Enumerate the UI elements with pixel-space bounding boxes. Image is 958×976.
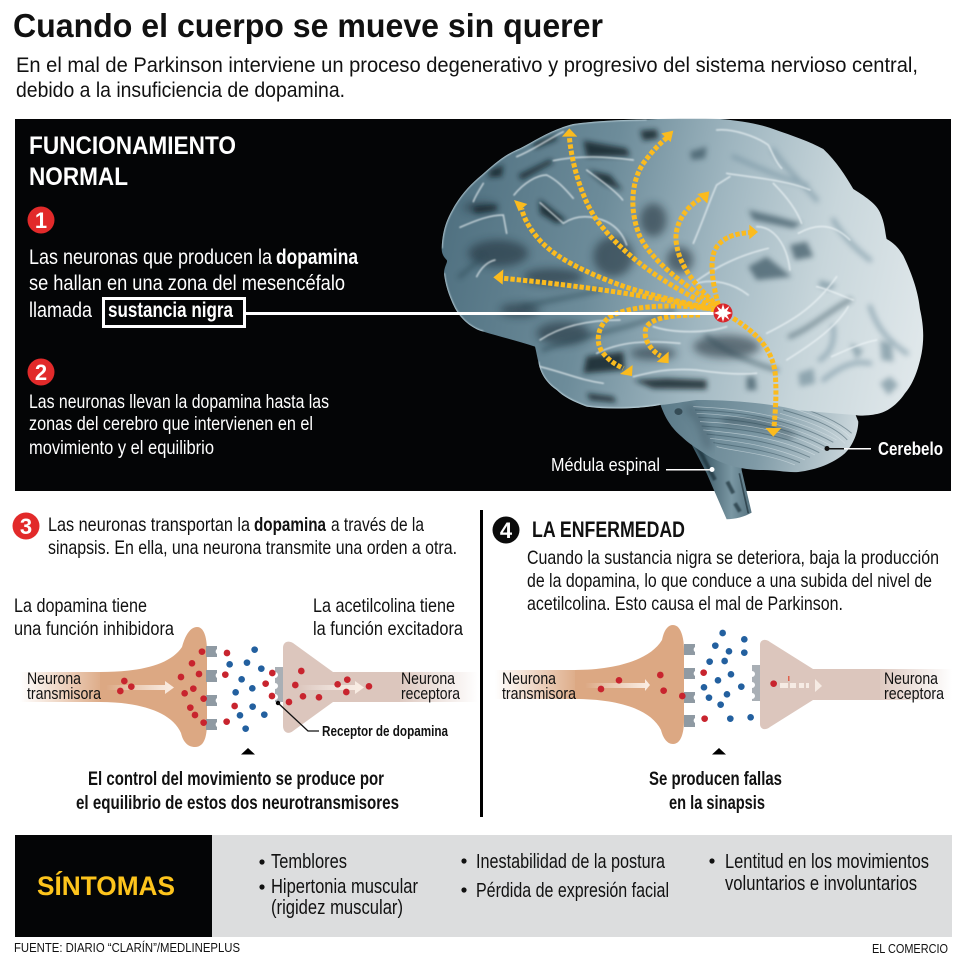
rim light bbox=[442, 119, 660, 409]
soft dark regions bbox=[463, 202, 760, 360]
callout: sustancia nigra: sustancia nigra bbox=[108, 299, 233, 322]
signal arrows bbox=[106, 681, 364, 694]
cerebellum bbox=[660, 397, 858, 472]
label: neurona receptora: Neurona bbox=[401, 670, 456, 688]
label: neurona receptora 2: Neurona bbox=[884, 670, 939, 688]
text block 3: a través de la bbox=[331, 514, 424, 536]
heading: funcionamiento normal: FUNCIONAMIENTO bbox=[29, 132, 236, 160]
medulla bbox=[688, 433, 752, 519]
heading: la enfermedad: LA ENFERMEDAD bbox=[532, 517, 685, 542]
text block 3: sinapsis. En ella, una neurona transmite una orden a otra. bbox=[48, 537, 457, 559]
transmitter receptors bbox=[684, 644, 695, 727]
intro text: En el mal de Parkinson interviene un proceso degenerativo y progresivo del sistema nervioso central, bbox=[16, 54, 918, 77]
dopamine receptor bar bbox=[275, 667, 283, 702]
heading: funcionamiento normal bbox=[29, 132, 236, 191]
neurotransmitter dots bbox=[117, 646, 372, 732]
badge 2 bbox=[28, 358, 54, 386]
label: neurona transmisora 2 bbox=[502, 670, 577, 703]
symptoms column 2: Pérdida de expresión facial bbox=[476, 880, 669, 902]
symptoms column 1: Hipertonia muscular bbox=[271, 876, 418, 898]
text block 1: llamada bbox=[29, 299, 92, 322]
symptoms column 1: (rigidez muscular) bbox=[271, 897, 403, 919]
caption: equilibrio bbox=[76, 769, 399, 814]
label: dopamina inhibidora bbox=[14, 595, 174, 640]
dopamine receptor bar bbox=[752, 665, 760, 701]
label: neurona transmisora: Neurona bbox=[27, 670, 82, 688]
panel: sintomas bbox=[15, 835, 952, 937]
heading: sintomas: SÍNTOMAS bbox=[37, 870, 175, 901]
text block 1: dopamina bbox=[276, 246, 358, 269]
caption: fallas: Se producen fallas bbox=[649, 769, 782, 790]
diagram: normal synapse bbox=[20, 627, 478, 754]
label: neurona transmisora 2: transmisora bbox=[502, 685, 577, 703]
cerebrum body bbox=[442, 119, 923, 416]
intro text: debido a la insuficiencia de dopamina. bbox=[16, 79, 345, 102]
symptoms column 1: Temblores bbox=[271, 851, 347, 873]
intro text bbox=[16, 54, 918, 102]
callout: receptor de dopamina: Receptor de dopamina bbox=[322, 724, 449, 740]
symptoms column 2 bbox=[461, 851, 669, 902]
receiving neuron bbox=[760, 640, 952, 729]
text block 1 bbox=[29, 246, 358, 322]
source: FUENTE: DIARIO “CLARÍN”/MEDLINEPLUS bbox=[14, 940, 240, 955]
illustration: brain bbox=[442, 119, 923, 519]
transmitter receptors bbox=[206, 646, 217, 730]
bright ridges bbox=[460, 130, 877, 383]
label: cerebelo bbox=[824, 439, 943, 459]
text block 1: Las neuronas que producen la bbox=[29, 246, 272, 269]
text block 2: movimiento y el equilibrio bbox=[29, 438, 214, 459]
transmitting neuron bbox=[495, 625, 684, 744]
badge 4: 4 bbox=[500, 518, 513, 543]
label: neurona receptora 2: receptora bbox=[884, 685, 945, 703]
text block 2: Las neuronas llevan la dopamina hasta las bbox=[29, 392, 329, 413]
text block 1: se hallan en una zona del mesencéfalo bbox=[29, 272, 345, 295]
badge 2: 2 bbox=[35, 360, 47, 385]
text block 2: zonas del cerebro que intervienen en el bbox=[29, 414, 313, 435]
caption: fallas: en la sinapsis bbox=[669, 793, 765, 814]
marker triangle bbox=[712, 748, 726, 754]
text block 3 bbox=[48, 514, 457, 559]
caption: equilibrio: El control del movimiento se produce por bbox=[88, 769, 384, 790]
label: neurona transmisora 2: Neurona bbox=[502, 670, 557, 688]
label: cerebelo: Cerebelo bbox=[878, 439, 943, 459]
symptoms column 1 bbox=[259, 851, 418, 919]
label: acetilcolina excitadora bbox=[313, 595, 463, 640]
panel: funcionamiento normal bbox=[15, 119, 951, 491]
caption: equilibrio: el equilibrio de estos dos neurotransmisores bbox=[76, 793, 399, 814]
badge 3 bbox=[12, 512, 40, 540]
icon: sustancia nigra spark bbox=[714, 304, 732, 322]
symptoms column 2: Inestabilidad de la postura bbox=[476, 851, 666, 873]
receiving neuron bbox=[283, 642, 478, 733]
label: neurona receptora: receptora bbox=[401, 685, 461, 703]
dark sulci left bbox=[473, 129, 707, 403]
text block 3: dopamina bbox=[254, 514, 326, 536]
label: neurona receptora 2 bbox=[884, 670, 945, 703]
label: dopamina inhibidora: La dopamina tiene bbox=[14, 595, 147, 617]
credit: EL COMERCIO bbox=[872, 942, 948, 956]
label: neurona transmisora bbox=[27, 670, 102, 703]
badge 1: 1 bbox=[35, 208, 47, 233]
label: acetilcolina excitadora: la función excitadora bbox=[313, 618, 463, 640]
badge 4 bbox=[492, 516, 520, 544]
brain surface detail bbox=[442, 119, 907, 409]
lighter sulci bbox=[460, 257, 850, 370]
transmitting neuron bbox=[20, 627, 207, 747]
text block 3: Las neuronas transportan la bbox=[48, 514, 250, 536]
dopamine pathway arrows bbox=[493, 128, 781, 437]
badge 3: 3 bbox=[20, 514, 32, 539]
symptoms column 3 bbox=[709, 851, 929, 895]
text block 4: acetilcolina. Esto causa el mal de Parkinson. bbox=[527, 593, 843, 615]
soft sulci right bbox=[690, 147, 813, 390]
marker triangle bbox=[241, 748, 255, 754]
label: medula espinal: Médula espinal bbox=[551, 455, 660, 475]
callout: receptor de dopamina bbox=[276, 701, 449, 740]
pointer line: sustancia nigra bbox=[246, 312, 724, 315]
neurotransmitter dots bbox=[598, 630, 777, 722]
label: neurona transmisora: transmisora bbox=[27, 685, 102, 703]
diagram: damaged synapse bbox=[495, 625, 952, 754]
signal arrows bbox=[585, 676, 822, 692]
text block 2 bbox=[29, 392, 329, 459]
heading: funcionamiento normal: NORMAL bbox=[29, 163, 128, 191]
title: Cuando el cuerpo se mueve sin querer bbox=[13, 7, 603, 44]
badge 1 bbox=[28, 206, 54, 234]
label: acetilcolina excitadora: La acetilcolina tiene bbox=[313, 595, 455, 617]
text block 4 bbox=[527, 547, 939, 615]
symptoms column 3: voluntarios e involuntarios bbox=[725, 873, 917, 895]
caption: fallas bbox=[649, 769, 782, 814]
label: dopamina inhibidora: una función inhibidora bbox=[14, 618, 174, 640]
label: neurona receptora bbox=[401, 670, 461, 703]
